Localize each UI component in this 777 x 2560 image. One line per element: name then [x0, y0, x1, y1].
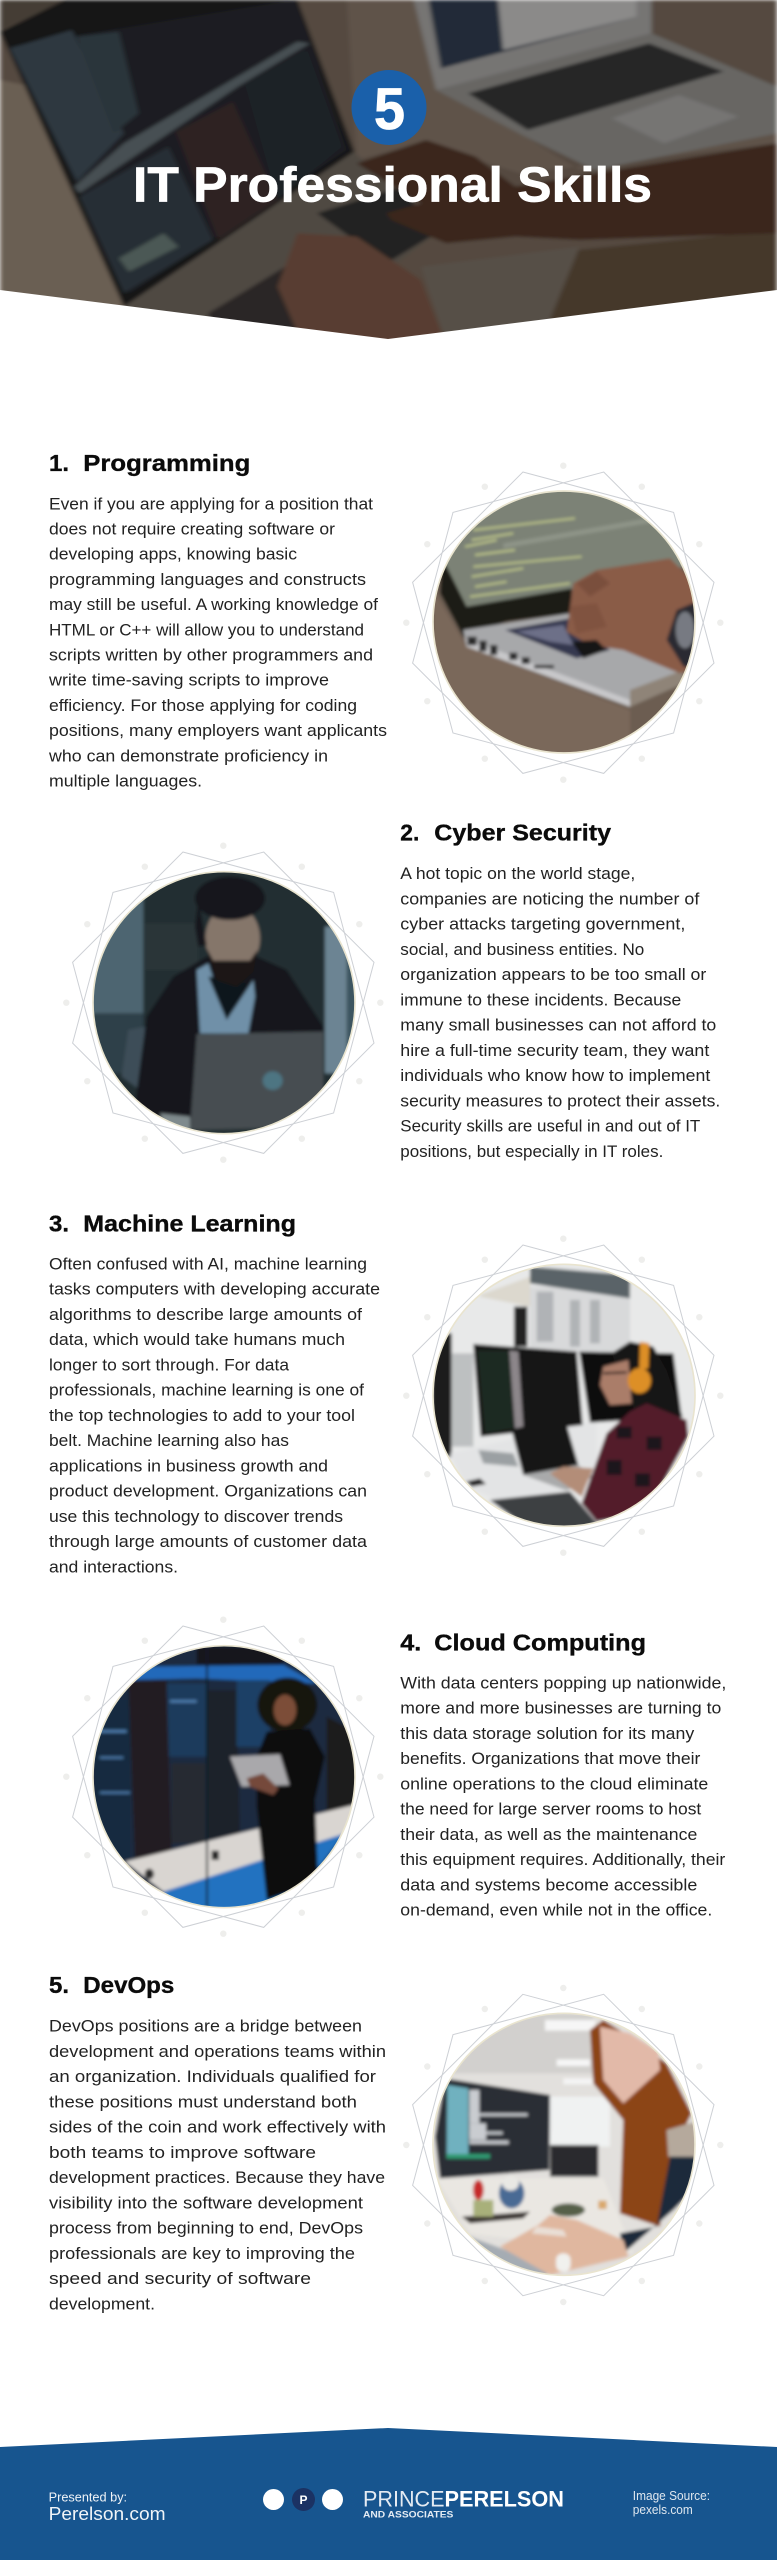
text block: Cyber Security: cyber attacks targeting government,: [400, 914, 685, 934]
text block: Cyber Security: organization appears to be too small or: [400, 965, 707, 984]
text block: Programming: multiple languages.: [49, 772, 202, 790]
image: woman with laptop in server room: [63, 1616, 384, 1937]
footer: logo dots: [263, 2488, 343, 2511]
heading: Machine Learning: Machine Learning: [83, 1211, 296, 1237]
heading: Programming: 1.: [49, 450, 69, 476]
text block: Programming: who can demonstrate proficiency in: [48, 746, 328, 765]
text block: Cyber Security: individuals who know how to implement: [400, 1066, 711, 1085]
header number badge: 5: [374, 77, 405, 142]
text block: Machine Learning: algorithms to describe large amounts of: [49, 1305, 362, 1324]
text block: Cloud Computing: [400, 1673, 726, 1920]
text block: Programming: [48, 494, 387, 790]
text block: Programming: may still be useful. A working knowledge of: [49, 595, 378, 614]
text block: Cloud Computing: benefits. Organizations that move their: [400, 1749, 701, 1768]
footer: logo dots: P: [299, 2493, 308, 2507]
image: bearded man at laptop: [63, 842, 384, 1163]
heading: DevOps: 5.: [49, 1972, 69, 1998]
text block: DevOps: visibility into the software development: [49, 2193, 363, 2212]
text block: Programming: HTML or C++ will allow you to understand: [49, 620, 364, 639]
footer: image source: Image Source:: [633, 2489, 710, 2503]
header: photo banner: [0, 0, 777, 343]
heading: DevOps: [49, 1972, 174, 1998]
left laptop base: [355, 156, 360, 160]
text block: DevOps: development practices. Because they have: [49, 2168, 385, 2187]
text block: Programming: efficiency. For those applying for coding: [49, 696, 357, 715]
text block: Cloud Computing: this equipment requires. Additionally, their: [400, 1850, 726, 1869]
text block: Programming: write time-saving scripts to improve: [48, 671, 329, 690]
text block: Cloud Computing: their data, as well as the maintenance: [400, 1825, 697, 1844]
text block: Machine Learning: longer to sort through. For data: [49, 1355, 290, 1374]
text block: DevOps: development and operations teams within: [49, 2042, 386, 2061]
text block: Machine Learning: Often confused with AI, machine learning: [49, 1254, 367, 1273]
footer: logo wordmark: PERELSON: [444, 2487, 564, 2512]
heading: Cyber Security: Cyber Security: [434, 820, 611, 846]
text block: Machine Learning: applications in business growth and: [49, 1456, 328, 1475]
text block: Programming: does not require creating software or: [49, 520, 335, 538]
footer: image source: [633, 2489, 710, 2517]
heading: Cloud Computing: 4.: [400, 1630, 421, 1656]
right laptop: [414, 0, 652, 90]
image: woman with headphones at monitors: [403, 1236, 724, 1556]
text block: Machine Learning: belt. Machine learning also has: [49, 1431, 289, 1450]
text block: Cyber Security: A hot topic on the world stage,: [400, 864, 635, 883]
text block: DevOps: [49, 2016, 386, 2313]
text block: Machine Learning: product development. Organizations can: [49, 1482, 367, 1501]
text block: DevOps: DevOps positions are a bridge between: [49, 2016, 362, 2036]
text block: Machine Learning: the top technologies to add to your tool: [49, 1406, 355, 1425]
footer: image source: pexels.com: [633, 2503, 693, 2517]
text block: Cyber Security: hire a full-time security team, they want: [400, 1041, 710, 1060]
text block: Machine Learning: professionals, machine learning is one of: [49, 1381, 364, 1400]
footer panel: [0, 2428, 777, 2560]
text block: Cyber Security: companies are noticing the number of: [400, 889, 700, 908]
footer: logo wordmark: [363, 2487, 564, 2521]
image: hand typing on laptop: [403, 462, 724, 783]
text block: DevOps: sides of the coin and work effectively with: [49, 2118, 386, 2136]
heading: DevOps: DevOps: [83, 1972, 174, 1998]
text block: Cloud Computing: this data storage solution for its many: [400, 1724, 695, 1743]
text block: Cyber Security: [400, 864, 720, 1161]
text block: DevOps: development.: [49, 2294, 155, 2313]
section 1: Programming: [48, 450, 724, 790]
footer: logo wordmark: AND ASSOCIATES: [363, 2510, 453, 2521]
text block: Cyber Security: many small businesses can not afford to: [400, 1016, 716, 1034]
text block: Cloud Computing: more and more businesses are turning to: [400, 1699, 721, 1718]
header number badge: [352, 70, 426, 145]
text block: Programming: positions, many employers want applicants: [49, 721, 387, 740]
text block: Programming: programming languages and constructs: [49, 570, 366, 589]
text block: Cloud Computing: on-demand, even while not in the office.: [400, 1901, 712, 1920]
text block: Cyber Security: Security skills are useful in and out of IT: [400, 1116, 700, 1136]
footer: presented by: Presented by:: [49, 2490, 127, 2504]
text block: DevOps: an organization. Individuals qualified for: [49, 2067, 376, 2086]
text block: Programming: Even if you are applying for a position that: [49, 494, 373, 513]
text block: Cloud Computing: online operations to the cloud eliminate: [400, 1774, 708, 1793]
image: red-haired woman at desk: [403, 1985, 724, 2305]
text block: Cyber Security: security measures to protect their assets.: [400, 1091, 720, 1110]
text block: DevOps: these positions must understand both: [49, 2092, 357, 2111]
heading: Programming: Programming: [83, 450, 250, 476]
text block: Machine Learning: and interactions.: [49, 1557, 178, 1576]
section 4: Cloud Computing: [63, 1616, 726, 1937]
text block: Machine Learning: use this technology to discover trends: [49, 1507, 343, 1526]
text block: Programming: developing apps, knowing basic: [49, 545, 298, 564]
text block: DevOps: speed and security of software: [49, 2269, 311, 2288]
text block: DevOps: professionals are key to improving the: [49, 2244, 355, 2263]
footer: presented by: Perelson.com: [49, 2504, 166, 2524]
text block: Cloud Computing: data and systems become accessible: [400, 1875, 697, 1894]
text block: Machine Learning: [49, 1254, 380, 1576]
section 5: DevOps: [49, 1972, 724, 2313]
left laptop: [0, 0, 354, 307]
footer: logo wordmark: PRINCE: [363, 2487, 444, 2512]
text block: Machine Learning: tasks computers with developing accurate: [49, 1280, 380, 1299]
section 3: Machine Learning: [49, 1211, 724, 1576]
text block: Cloud Computing: With data centers popping up nationwide,: [400, 1673, 726, 1692]
text block: Cyber Security: social, and business entities. No: [400, 940, 644, 959]
footer: presented by: [49, 2490, 166, 2524]
text block: Programming: scripts written by other programmers and: [49, 646, 373, 664]
text block: Cloud Computing: the need for large server rooms to host: [400, 1800, 702, 1819]
text block: Cyber Security: immune to these incidents. Because: [400, 990, 681, 1009]
heading: Machine Learning: 3.: [49, 1211, 69, 1237]
heading: Cloud Computing: Cloud Computing: [434, 1630, 646, 1656]
hands: [357, 140, 777, 243]
text block: DevOps: process from beginning to end, DevOps: [49, 2218, 363, 2238]
text block: Machine Learning: data, which would take humans much: [49, 1330, 345, 1349]
heading: Cyber Security: 2.: [400, 820, 419, 846]
section 2: Cyber Security: [63, 820, 720, 1163]
text block: Cyber Security: positions, but especially in IT roles.: [400, 1142, 663, 1161]
text block: Machine Learning: through large amounts of customer data: [49, 1532, 368, 1551]
title: IT Professional Skills: [133, 158, 652, 212]
text block: DevOps: both teams to improve software: [49, 2143, 316, 2162]
